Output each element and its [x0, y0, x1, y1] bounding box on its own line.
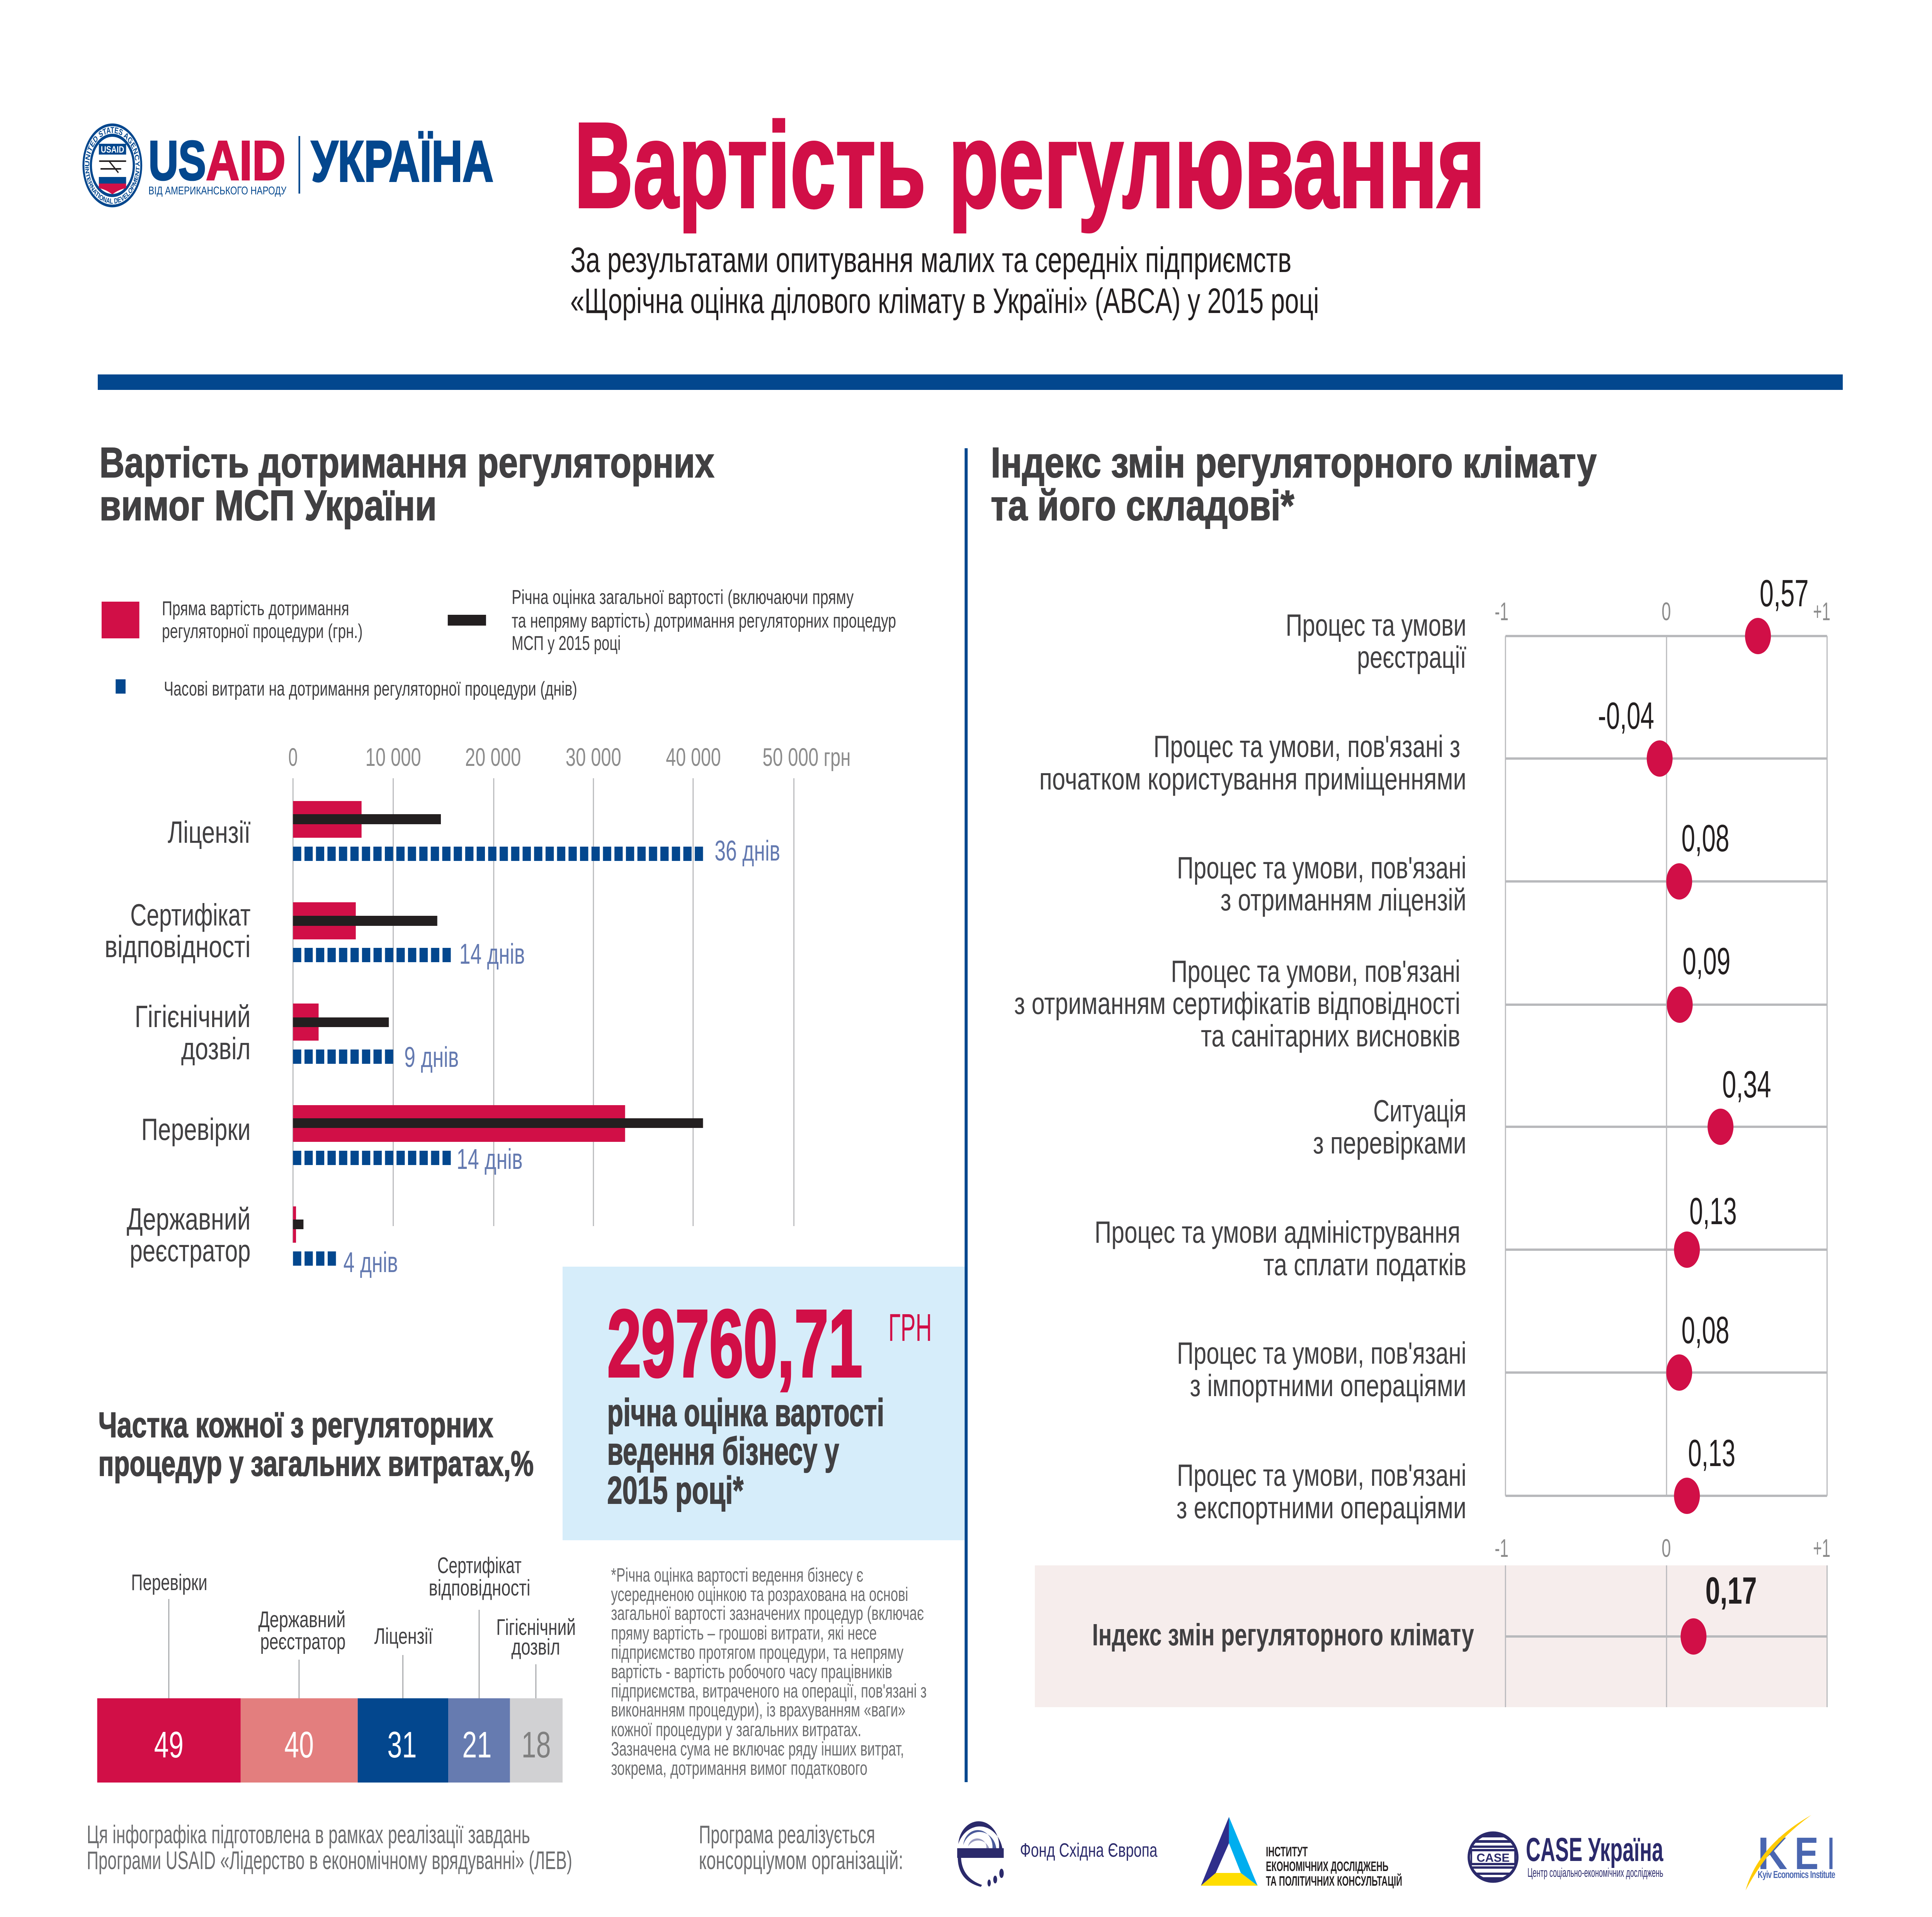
legend item: direct cost: [102, 597, 363, 643]
legend item: total annual cost: та непряму вартість) дотримання регуляторних процедур: [512, 609, 896, 632]
heading: regulatory climate index: [991, 439, 1597, 529]
chart axis labels: top: +1: [1813, 597, 1830, 626]
logo: KEI: I: [1828, 1828, 1834, 1879]
index row: inspections: Ситуація: [1373, 1093, 1466, 1128]
chart row: certificate: Сертифікат: [130, 897, 251, 932]
footnote: виконанням процедури), із врахуванням «ваги»: [611, 1699, 905, 1721]
segment: licences: Ліцензії: [374, 1623, 433, 1649]
heading: compliance cost: вимог МСП України: [99, 482, 437, 529]
panel: regulatory climate index: [991, 439, 1830, 1707]
chart row: inspections: [141, 1105, 703, 1175]
chart row: state registrar: [127, 1201, 398, 1278]
logo: IER: [1201, 1817, 1402, 1889]
callout: overall index: [1035, 1565, 1827, 1707]
chart axis labels: bottom: +1: [1813, 1534, 1830, 1563]
legend item: total annual cost: Річна оцінка загальної вартості (включаючи пряму: [512, 586, 854, 609]
index row: taxes: [1095, 1190, 1737, 1282]
segment: certificate: відповідності: [429, 1575, 531, 1601]
footnote: вартість - вартість робочого часу працівників: [611, 1661, 892, 1683]
legend item: time cost: Часові витрати на дотримання регуляторної процедури (днів): [164, 677, 577, 700]
segment: inspections: 49: [154, 1724, 184, 1766]
heading: regulatory climate index: та його складові*: [991, 482, 1294, 529]
callout: annual cost: ГРН: [888, 1306, 932, 1349]
segment: state registrar: 40: [284, 1724, 314, 1766]
index row: certificates: з отриманням сертифікатів відповідності: [1014, 986, 1460, 1021]
index row: premises: [1039, 695, 1673, 796]
chart row: state registrar: реєстратор: [130, 1233, 251, 1268]
footnote: пряму вартість – грошові витрати, які несе: [611, 1623, 877, 1644]
chart row: certificate: 14 днів: [459, 938, 525, 970]
footer consortium note: Програма реалізується: [699, 1820, 875, 1849]
index row: registration: реєстрації: [1357, 640, 1466, 674]
footnote: зокрема, дотримання вимог податкового: [611, 1758, 867, 1779]
footnote: *Річна оцінка вартості ведення бізнесу є: [611, 1565, 863, 1586]
footer consortium note: [699, 1820, 903, 1875]
chart row: hygiene permit: [134, 999, 459, 1073]
legend item: direct cost: Пряма вартість дотримання: [162, 597, 349, 620]
index row: exports: з експортними операціями: [1176, 1490, 1466, 1525]
heading: regulatory climate index: Індекс змін регуляторного клімату: [991, 439, 1597, 486]
logo wordmark: USAID: AID: [206, 130, 286, 192]
logo: KEI: E: [1794, 1828, 1818, 1879]
chart row: licences: [168, 801, 780, 867]
subtitle: За результатами опитування малих та середніх підприємств: [570, 240, 1291, 280]
footnote: кожної процедури у загальних витратах.: [611, 1719, 861, 1741]
index row: certificates: 0,09: [1682, 940, 1730, 983]
footnote: [611, 1565, 927, 1779]
logo wordmark: Україна: УКРАЇНА: [311, 129, 493, 194]
chart row: inspections: 14 днів: [457, 1143, 523, 1175]
callout: overall index: 0,17: [1705, 1570, 1757, 1612]
index row: inspections: 0,34: [1722, 1063, 1771, 1106]
chart row: hygiene permit: дозвіл: [181, 1031, 251, 1066]
index row: taxes: 0,13: [1689, 1190, 1737, 1233]
callout: annual cost: 29760,71: [607, 1291, 862, 1397]
heading: compliance cost: Вартість дотримання регуляторних: [99, 439, 714, 486]
index row: registration: Процес та умови: [1286, 607, 1466, 642]
callout: annual cost: 2015 році*: [607, 1469, 743, 1512]
dot chart: index components: [1014, 572, 1830, 1563]
subtitle: «Щорічна оцінка ділового клімату в Україні» (ABCA) у 2015 році: [570, 281, 1319, 321]
index row: exports: Процес та умови, пов'язані: [1177, 1458, 1466, 1492]
logo: CASE Ukraine: [1468, 1831, 1663, 1883]
segment: hygiene permit: [496, 1614, 576, 1783]
logo wordmark: USAID: ВІД АМЕРИКАНСЬКОГО НАРОДУ: [148, 185, 287, 197]
index row: certificates: та санітарних висновків: [1201, 1018, 1460, 1053]
chart row: state registrar: 4 днів: [344, 1246, 398, 1278]
logo: USAID Ukraine: [83, 125, 493, 206]
index row: premises: початком користування приміщеннями: [1039, 761, 1466, 796]
icon: USAID seal: UNITED STATES AGENCY: [84, 126, 141, 167]
index row: premises: -0,04: [1598, 695, 1654, 737]
panel: compliance cost: [99, 439, 896, 1278]
logo: East Europe Foundation: [957, 1821, 1158, 1887]
icon: USAID seal: INTERNATIONAL DEVELOPMENT: [84, 166, 141, 206]
index row: imports: [1177, 1309, 1729, 1403]
logo: IER: ЕКОНОМІЧНИХ ДОСЛІДЖЕНЬ: [1266, 1859, 1388, 1874]
chart axis labels: bottom: -1: [1495, 1534, 1509, 1563]
subtitle: [570, 240, 1319, 321]
index row: imports: 0,08: [1681, 1309, 1729, 1352]
index row: exports: [1176, 1432, 1735, 1525]
logo: CASE Ukraine: Центр соціально-економічних досліджень: [1527, 1866, 1663, 1880]
segment: state registrar: [241, 1607, 358, 1783]
segment: inspections: Перевірки: [131, 1570, 207, 1595]
legend item: total annual cost: [448, 586, 896, 655]
segment: state registrar: реєстратор: [260, 1629, 345, 1654]
heading: cost shares: процедур у загальних витратах,%: [98, 1444, 534, 1483]
chart axis labels: 40 000: [666, 743, 721, 772]
segment: licences: [358, 1623, 448, 1783]
logo: KEI: [1746, 1815, 1835, 1890]
chart row: certificate: [105, 897, 525, 970]
index row: imports: з імпортними операціями: [1190, 1368, 1466, 1403]
legend item: direct cost: регуляторної процедури (грн.): [162, 620, 363, 643]
segment: certificate: 21: [462, 1724, 492, 1766]
chart axis labels: top: 0: [1662, 597, 1671, 626]
index row: licences: з отриманням ліцензій: [1220, 882, 1466, 917]
callout: overall index: Індекс змін регуляторного клімату: [1092, 1617, 1474, 1652]
footnote: підприємство протягом процедури, та непряму: [611, 1642, 903, 1664]
heading: cost shares: Частка кожної з регуляторних: [98, 1405, 493, 1445]
index row: certificates: [1014, 940, 1730, 1053]
logo: CASE Ukraine: CASE Україна: [1526, 1831, 1663, 1868]
chart row: state registrar: Державний: [127, 1201, 251, 1236]
footnote: Зазначена сума не включає ряду інших витрат,: [611, 1738, 904, 1760]
chart axis labels: [288, 743, 850, 772]
stacked bar chart: [97, 1553, 576, 1783]
index row: imports: Процес та умови, пов'язані: [1177, 1335, 1466, 1370]
index row: taxes: та сплати податків: [1264, 1247, 1466, 1282]
segment: certificate: Сертифікат: [437, 1553, 522, 1578]
index row: licences: Процес та умови, пов'язані: [1177, 850, 1466, 885]
chart row: licences: 36 днів: [714, 835, 780, 867]
logo: KEI: K: [1758, 1828, 1787, 1879]
segment: certificate: [429, 1553, 531, 1783]
chart axis labels: 50 000 грн: [762, 743, 850, 772]
footnote: підприємства, витраченого на операції, пов'язані з: [611, 1681, 927, 1702]
segment: licences: 31: [387, 1724, 417, 1766]
footnote: усередненою оцінкою та розрахована на основі: [611, 1584, 908, 1606]
chart row: hygiene permit: Гігієнічний: [134, 999, 251, 1034]
panel: cost shares: [97, 1405, 576, 1783]
callout: annual cost: [563, 1267, 964, 1540]
logo: CASE Ukraine: CASE: [1476, 1851, 1510, 1864]
logo wordmark: USAID: [148, 130, 287, 197]
legend item: total annual cost: МСП у 2015 році: [512, 632, 621, 655]
index row: premises: Процес та умови, пов'язані з: [1153, 729, 1460, 764]
chart row: inspections: Перевірки: [141, 1112, 251, 1146]
heading: cost shares: [98, 1405, 534, 1483]
chart row: hygiene permit: 9 днів: [404, 1041, 459, 1073]
heading: compliance cost: [99, 439, 714, 529]
segment: hygiene permit: Гігієнічний: [496, 1614, 576, 1640]
icon: USAID seal: [83, 125, 141, 206]
chart axis labels: 30 000: [566, 743, 621, 772]
logo wordmark: USAID: US: [148, 130, 206, 192]
index row: taxes: Процес та умови адміністрування: [1095, 1214, 1460, 1249]
chart axis labels: 0: [288, 743, 298, 772]
segment: state registrar: Державний: [258, 1607, 345, 1632]
index row: licences: 0,08: [1681, 817, 1729, 860]
chart axis labels: top: -1: [1495, 597, 1509, 626]
segment: hygiene permit: 18: [521, 1724, 551, 1766]
chart axis labels: bottom: 0: [1662, 1534, 1671, 1563]
segment: hygiene permit: дозвіл: [511, 1634, 560, 1660]
chart axis labels: top: [1495, 597, 1830, 626]
segment: inspections: [97, 1570, 241, 1783]
footnote: загальної вартості зазначених процедур (включає: [611, 1603, 924, 1624]
index row: exports: 0,13: [1688, 1432, 1735, 1475]
index row: licences: [1177, 817, 1729, 917]
chart row: certificate: відповідності: [105, 929, 251, 964]
index row: registration: [1286, 572, 1809, 674]
logo: East Europe Foundation: Фонд Східна Європа: [1020, 1840, 1158, 1861]
callout: annual cost: ведення бізнесу у: [607, 1430, 839, 1473]
logo: IER: ТА ПОЛІТИЧНИХ КОНСУЛЬТАЦІЙ: [1266, 1874, 1402, 1889]
icon: USAID seal: USAID: [101, 145, 124, 155]
index row: inspections: [1313, 1063, 1771, 1160]
footer credit: Ця інфографіка підготовлена в рамках реалізації завдань: [87, 1820, 530, 1849]
index row: inspections: з перевірками: [1313, 1125, 1466, 1160]
logo: IER: ІНСТИТУТ: [1266, 1844, 1308, 1859]
footer credit: [87, 1820, 572, 1875]
index row: certificates: Процес та умови, пов'язані: [1171, 954, 1460, 988]
footer credit: Програми USAID «Лідерство в економічному врядуванні» (ЛЕВ): [87, 1846, 572, 1875]
legend: [102, 586, 896, 700]
title: Вартість регулювання: [574, 97, 1485, 234]
index row: registration: 0,57: [1760, 572, 1809, 615]
footer consortium note: консорціумом організацій:: [699, 1846, 903, 1875]
logo: KEI: Kyiv Economics Institute: [1758, 1869, 1835, 1880]
chart axis labels: 10 000: [366, 743, 421, 772]
chart axis labels: 20 000: [465, 743, 521, 772]
callout: annual cost: річна оцінка вартості: [607, 1391, 884, 1434]
chart axis labels: bottom: [1495, 1534, 1830, 1563]
chart row: licences: Ліцензії: [168, 815, 251, 849]
bar chart: compliance cost: [105, 743, 850, 1278]
